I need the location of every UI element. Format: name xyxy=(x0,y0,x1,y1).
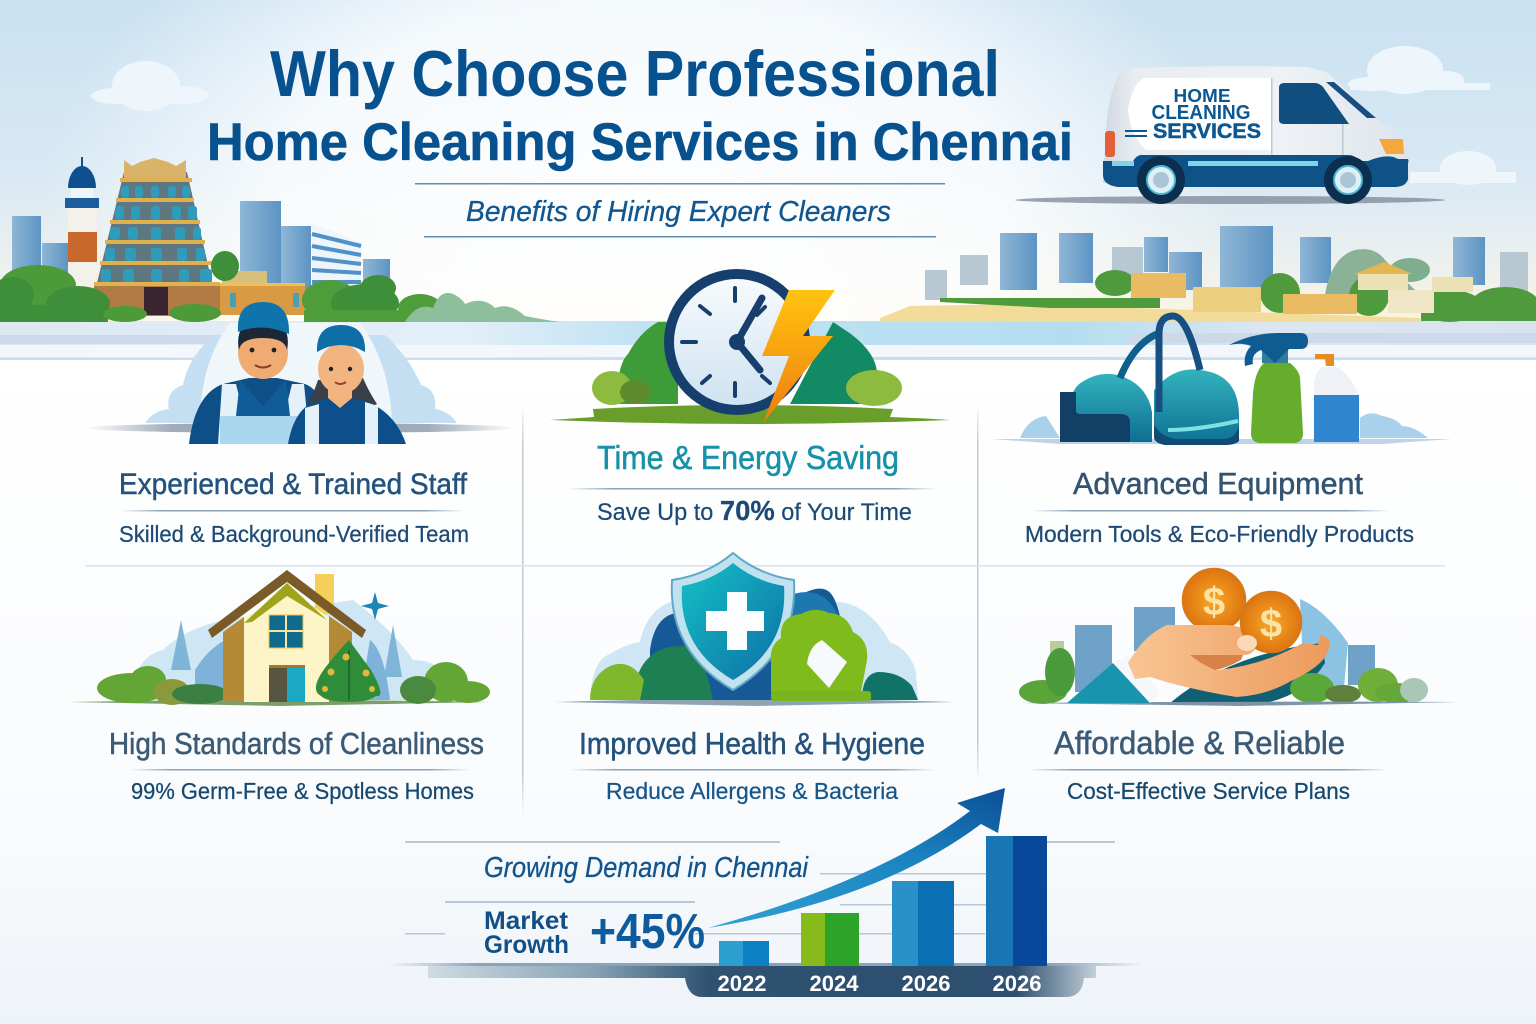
water band xyxy=(0,321,1536,360)
trees xyxy=(0,251,442,322)
icon: hand with coins: $ xyxy=(1260,602,1282,646)
van body xyxy=(1103,66,1408,183)
van lights xyxy=(1105,131,1404,157)
chart heading: Growing Demand in Chennai xyxy=(484,852,809,884)
growth value: +45% xyxy=(590,905,705,959)
description: Save Up to 70% of Your Time xyxy=(597,495,912,526)
year labels xyxy=(718,971,1041,996)
cloud: top right xyxy=(1348,46,1490,94)
description: 99% Germ-Free & Spotless Homes xyxy=(131,778,474,804)
title: Why Choose Professional xyxy=(270,37,1000,110)
van wheels xyxy=(1137,156,1372,204)
description: Reduce Allergens & Bacteria xyxy=(606,778,898,804)
van lettering: HOME xyxy=(1174,86,1230,106)
heading: Advanced Equipment xyxy=(1073,466,1363,501)
heading: Improved Health & Hygiene xyxy=(579,726,925,761)
heading: Time & Energy Saving xyxy=(597,439,899,476)
icon: hand with coins xyxy=(1019,568,1460,706)
icon: cleaners xyxy=(85,302,515,444)
distant hills xyxy=(405,293,560,322)
market growth label: Market xyxy=(484,907,569,935)
van lettering: CLEANING xyxy=(1152,102,1250,124)
growth arrow xyxy=(708,788,1005,928)
cloud: right middle xyxy=(1410,151,1516,185)
grid dividers xyxy=(85,405,1445,815)
subtitle: Benefits of Hiring Expert Cleaners xyxy=(466,196,891,228)
chart rules xyxy=(405,841,1115,934)
heading: Affordable & Reliable xyxy=(1054,725,1345,761)
baseline platform xyxy=(388,963,1143,997)
skyline: right Chennai seafront xyxy=(880,226,1536,322)
icon: vacuum and bottles xyxy=(992,316,1452,445)
description: Skilled & Background-Verified Team xyxy=(119,521,469,547)
cleaner bottle xyxy=(1314,367,1359,396)
icon: clock and bolt xyxy=(550,269,950,424)
background: lower page xyxy=(0,355,1536,1024)
lighthouse xyxy=(65,157,99,288)
striped tower xyxy=(312,224,361,296)
spray bottle xyxy=(1251,363,1303,443)
year labels: 2026 xyxy=(902,971,950,996)
year labels: 2022 xyxy=(718,971,766,996)
growth chart xyxy=(388,788,1143,997)
skyline: left Chennai landmarks xyxy=(0,157,560,322)
van lettering: SERVICES xyxy=(1153,120,1261,143)
description: Modern Tools & Eco-Friendly Products xyxy=(1025,521,1414,547)
cloud: top left xyxy=(91,61,208,111)
heading: High Standards of Cleanliness xyxy=(109,726,484,761)
icon: house xyxy=(70,570,490,706)
year labels: 2026 xyxy=(993,971,1041,996)
heading: Experienced & Trained Staff xyxy=(119,468,468,501)
panel: advanced equipment xyxy=(992,316,1452,547)
panel: affordable xyxy=(1019,568,1460,804)
market growth label: Growth xyxy=(484,931,569,959)
background: sky xyxy=(0,0,1536,322)
man xyxy=(189,302,331,444)
panel: cleanliness xyxy=(70,570,490,804)
van illustration xyxy=(1015,66,1445,204)
van lower stripe xyxy=(1103,155,1408,187)
title: Home Cleaning Services in Chennai xyxy=(207,113,1073,172)
vacuum xyxy=(1068,374,1152,442)
distant towers xyxy=(12,201,390,302)
panel: health and hygiene xyxy=(555,553,955,804)
side hall xyxy=(220,271,305,315)
temple gopuram xyxy=(94,158,220,316)
title xyxy=(207,37,1073,172)
icon: hand with coins: $ xyxy=(1203,580,1225,624)
panel: experienced staff xyxy=(85,302,515,547)
bars xyxy=(719,836,1047,966)
panel: time and energy xyxy=(550,269,950,526)
woman xyxy=(288,325,406,444)
year labels: 2024 xyxy=(810,971,859,996)
market growth label xyxy=(484,907,569,959)
description: Cost-Effective Service Plans xyxy=(1067,778,1350,804)
van lettering xyxy=(1125,86,1261,143)
icon: shield and leaf xyxy=(555,553,955,706)
van window xyxy=(1279,83,1349,124)
